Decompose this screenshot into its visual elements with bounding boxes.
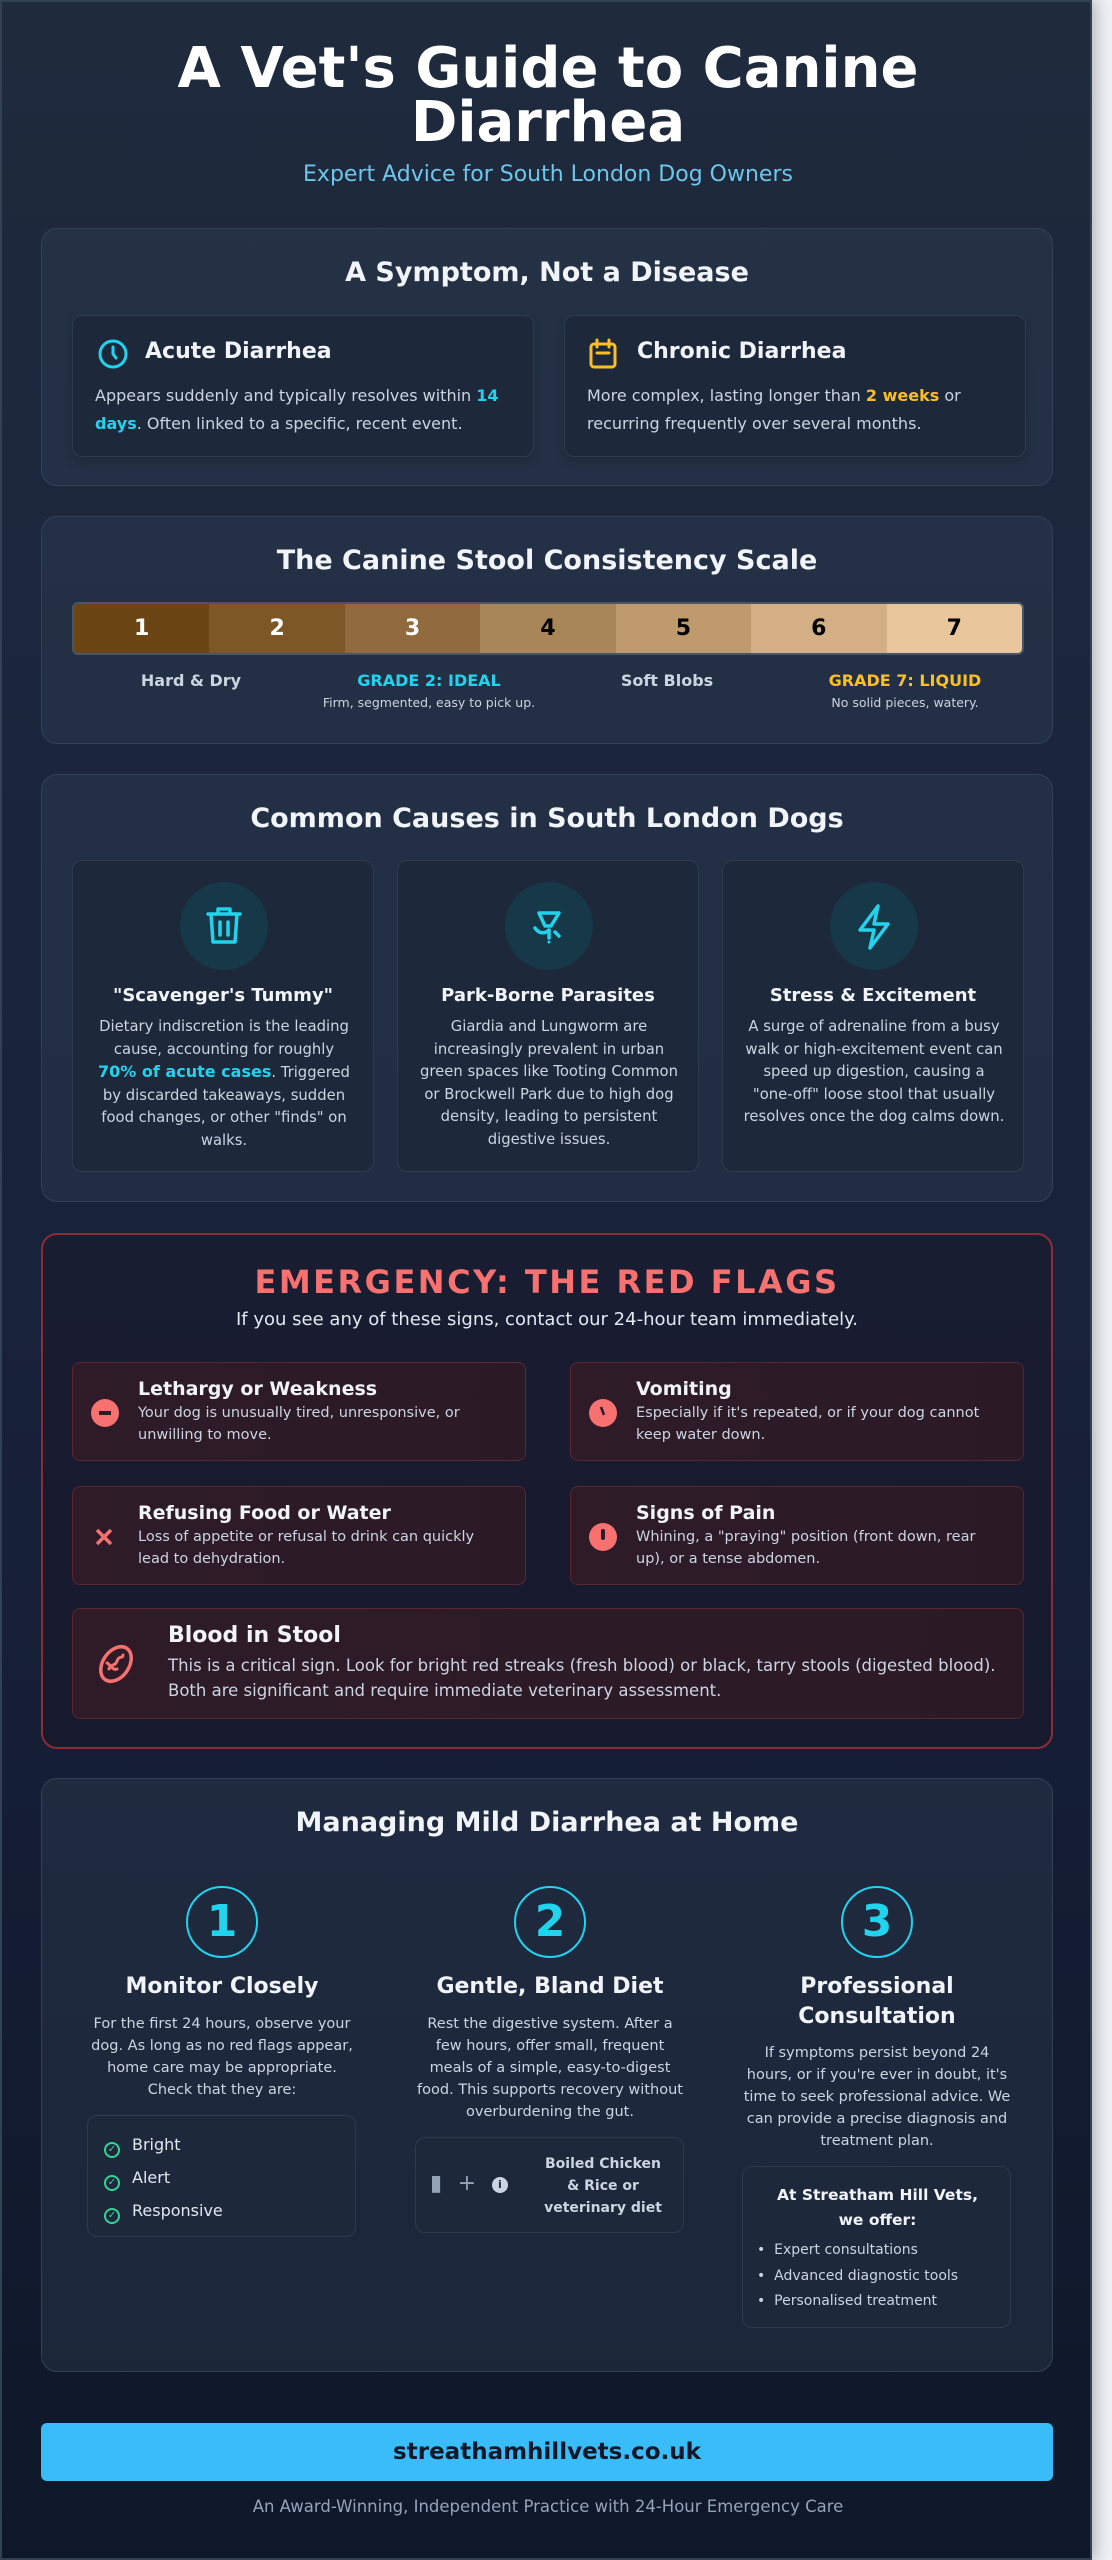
icon: parasite xyxy=(505,882,593,970)
heading: Park-Borne Parasites xyxy=(441,985,655,1006)
heading: Managing Mild Diarrhea at Home xyxy=(296,1807,798,1838)
heading: Stress & Excitement xyxy=(770,985,976,1006)
card: blood in stool xyxy=(72,1608,1024,1719)
diet box xyxy=(415,2137,684,2233)
footer button xyxy=(41,2423,1053,2481)
card: vomiting xyxy=(570,1362,1024,1461)
offer box: we offer: xyxy=(839,2211,916,2229)
panel: common causes xyxy=(41,774,1053,1202)
offer box: • Advanced diagnostic tools xyxy=(757,2268,958,2284)
subtitle: Expert Advice for South London Dog Owners xyxy=(303,162,793,187)
text: Rest the digestive system. After a few hours, offer small, frequent meals of a simple, easy-to-digest food. This supports recovery without overburdening the gut. xyxy=(417,2016,683,2120)
text: Appears suddenly and typically resolves within 14 days. Often linked to a specific, recent event. xyxy=(95,386,499,433)
text: Dietary indiscretion is the leading cause, accounting for roughly 70% of acute cases. Triggered by discarded takeaways, sudden food changes, or other "finds" on walks. xyxy=(98,1018,350,1148)
heading: Blood in Stool xyxy=(168,1623,341,1648)
text: For the first 24 hours, observe your dog. As long as no red flags appear, home care may be appropriate. Check that they are: xyxy=(91,2016,353,2098)
heading: Signs of Pain xyxy=(636,1502,775,1524)
heading: Consultation xyxy=(798,2004,956,2029)
heading xyxy=(798,1974,956,2029)
icons: i xyxy=(498,2178,502,2191)
card: chronic xyxy=(564,315,1026,457)
bar chart: scale: 3 xyxy=(405,616,420,641)
labels: Firm, segmented, easy to pick up. xyxy=(323,695,535,710)
subtitle: If you see any of these signs, contact our 24-hour team immediately. xyxy=(236,1309,858,1330)
offer box xyxy=(742,2166,1011,2328)
icon: lightning xyxy=(830,882,918,970)
icon: calendar xyxy=(590,338,616,368)
panel: emergency red flags xyxy=(41,1233,1053,1749)
checklist: ✓ xyxy=(108,2210,116,2221)
icon: number 2 xyxy=(514,1886,586,1958)
checklist: ✓ xyxy=(108,2144,116,2155)
title xyxy=(178,36,918,155)
footer button: streathamhillvets.co.uk xyxy=(393,2439,701,2465)
text: Boiled Chicken & Rice or veterinary diet xyxy=(544,2156,662,2216)
checklist: Responsive xyxy=(132,2201,223,2220)
card: refusing food xyxy=(72,1486,526,1585)
heading: Chronic Diarrhea xyxy=(637,339,846,364)
icon: number 3 xyxy=(841,1886,913,1958)
icon: intestine xyxy=(99,1644,133,1684)
checklist: Alert xyxy=(132,2168,170,2187)
card: parasites xyxy=(397,860,699,1172)
heading: "Scavenger's Tummy" xyxy=(113,985,333,1006)
heading: EMERGENCY: THE RED FLAGS xyxy=(254,1263,840,1301)
heading: The Canine Stool Consistency Scale xyxy=(277,545,817,576)
checklist xyxy=(87,2115,356,2237)
card: stress xyxy=(722,860,1024,1172)
panel: symptom not disease xyxy=(41,228,1053,486)
bar chart: scale: 6 xyxy=(811,616,826,641)
heading: Professional xyxy=(800,1974,954,1999)
text: A surge of adrenaline from a busy walk or high-excitement event can speed up digestion, causing a "one-off" loose stool that usually resolves once the dog calms down. xyxy=(744,1018,1004,1125)
offer box: • Personalised treatment xyxy=(757,2293,937,2309)
icon: number 1 xyxy=(186,1886,258,1958)
icon: number 1: 1 xyxy=(207,1896,237,1947)
checklist: ✓ xyxy=(108,2177,116,2188)
card: acute xyxy=(72,315,534,457)
text: If symptoms persist beyond 24 hours, or if you're ever in doubt, it's time to seek professional advice. We can provide a precise diagnosis and treatment plan. xyxy=(744,2045,1010,2149)
bar chart: scale: 7 xyxy=(947,616,962,641)
bar chart: scale: 2 xyxy=(269,616,285,641)
icon: number 3: 3 xyxy=(862,1896,892,1947)
labels xyxy=(141,671,981,710)
labels: GRADE 2: IDEAL xyxy=(357,671,501,690)
heading: Lethargy or Weakness xyxy=(138,1378,377,1400)
footer text: An Award-Winning, Independent Practice with 24-Hour Emergency Care xyxy=(253,2497,843,2516)
heading: Monitor Closely xyxy=(125,1974,319,1999)
card: scavenger xyxy=(72,860,374,1172)
text: Especially if it's repeated, or if your dog cannot keep water down. xyxy=(636,1405,979,1443)
panel: stool scale xyxy=(41,516,1053,744)
card: pain xyxy=(570,1486,1024,1585)
text: This is a critical sign. Look for bright red streaks (fresh blood) or black, tarry stools (digested blood). Both are significant and require immediate veterinary assessment. xyxy=(168,1656,996,1700)
panel: managing at home xyxy=(41,1778,1053,2372)
heading: Refusing Food or Water xyxy=(138,1502,391,1524)
title: A Vet's Guide to Canine xyxy=(178,36,918,101)
text: Whining, a "praying" position (front down, rear up), or a tense abdomen. xyxy=(636,1529,975,1567)
labels: Soft Blobs xyxy=(621,671,713,690)
text: Giardia and Lungworm are increasingly prevalent in urban green spaces like Tooting Common or Brockwell Park due to high dog density, leading to persistent digestive issues. xyxy=(420,1018,678,1148)
icon: cross xyxy=(96,1528,112,1546)
icon: clock xyxy=(98,340,128,368)
heading: Vomiting xyxy=(636,1378,732,1400)
icon: minus xyxy=(91,1399,119,1427)
heading: Acute Diarrhea xyxy=(145,339,332,364)
step 1 xyxy=(87,1886,356,2237)
step 3 xyxy=(742,1886,1011,2328)
icons: ▮ + xyxy=(430,2171,480,2196)
step 2 xyxy=(415,1886,684,2233)
card: lethargy xyxy=(72,1362,526,1461)
labels: Hard & Dry xyxy=(141,671,241,690)
icon: trash xyxy=(180,882,268,970)
text: Loss of appetite or refusal to drink can quickly lead to dehydration. xyxy=(138,1529,474,1567)
icon: vomit xyxy=(589,1399,617,1427)
bar chart: scale xyxy=(72,602,1024,655)
bar chart: scale: 1 xyxy=(134,616,149,641)
offer box: • Expert consultations xyxy=(757,2242,918,2258)
text: More complex, lasting longer than 2 weeks or recurring frequently over several months. xyxy=(587,386,961,433)
heading: Common Causes in South London Dogs xyxy=(250,803,844,834)
bar chart: scale: 4 xyxy=(540,616,556,641)
title: Diarrhea xyxy=(411,90,685,155)
labels: No solid pieces, watery. xyxy=(831,695,979,710)
bar chart: scale: 5 xyxy=(676,616,691,641)
icons xyxy=(430,2171,508,2196)
icon: number 2: 2 xyxy=(535,1896,565,1947)
offer box: At Streatham Hill Vets, xyxy=(777,2186,978,2204)
text: Your dog is unusually tired, unresponsive, or unwilling to move. xyxy=(138,1405,460,1443)
heading: Gentle, Bland Diet xyxy=(436,1974,664,1999)
labels: GRADE 7: LIQUID xyxy=(829,671,981,690)
checklist: Bright xyxy=(132,2135,181,2154)
icon: exclamation xyxy=(589,1523,617,1551)
heading: A Symptom, Not a Disease xyxy=(345,257,749,288)
